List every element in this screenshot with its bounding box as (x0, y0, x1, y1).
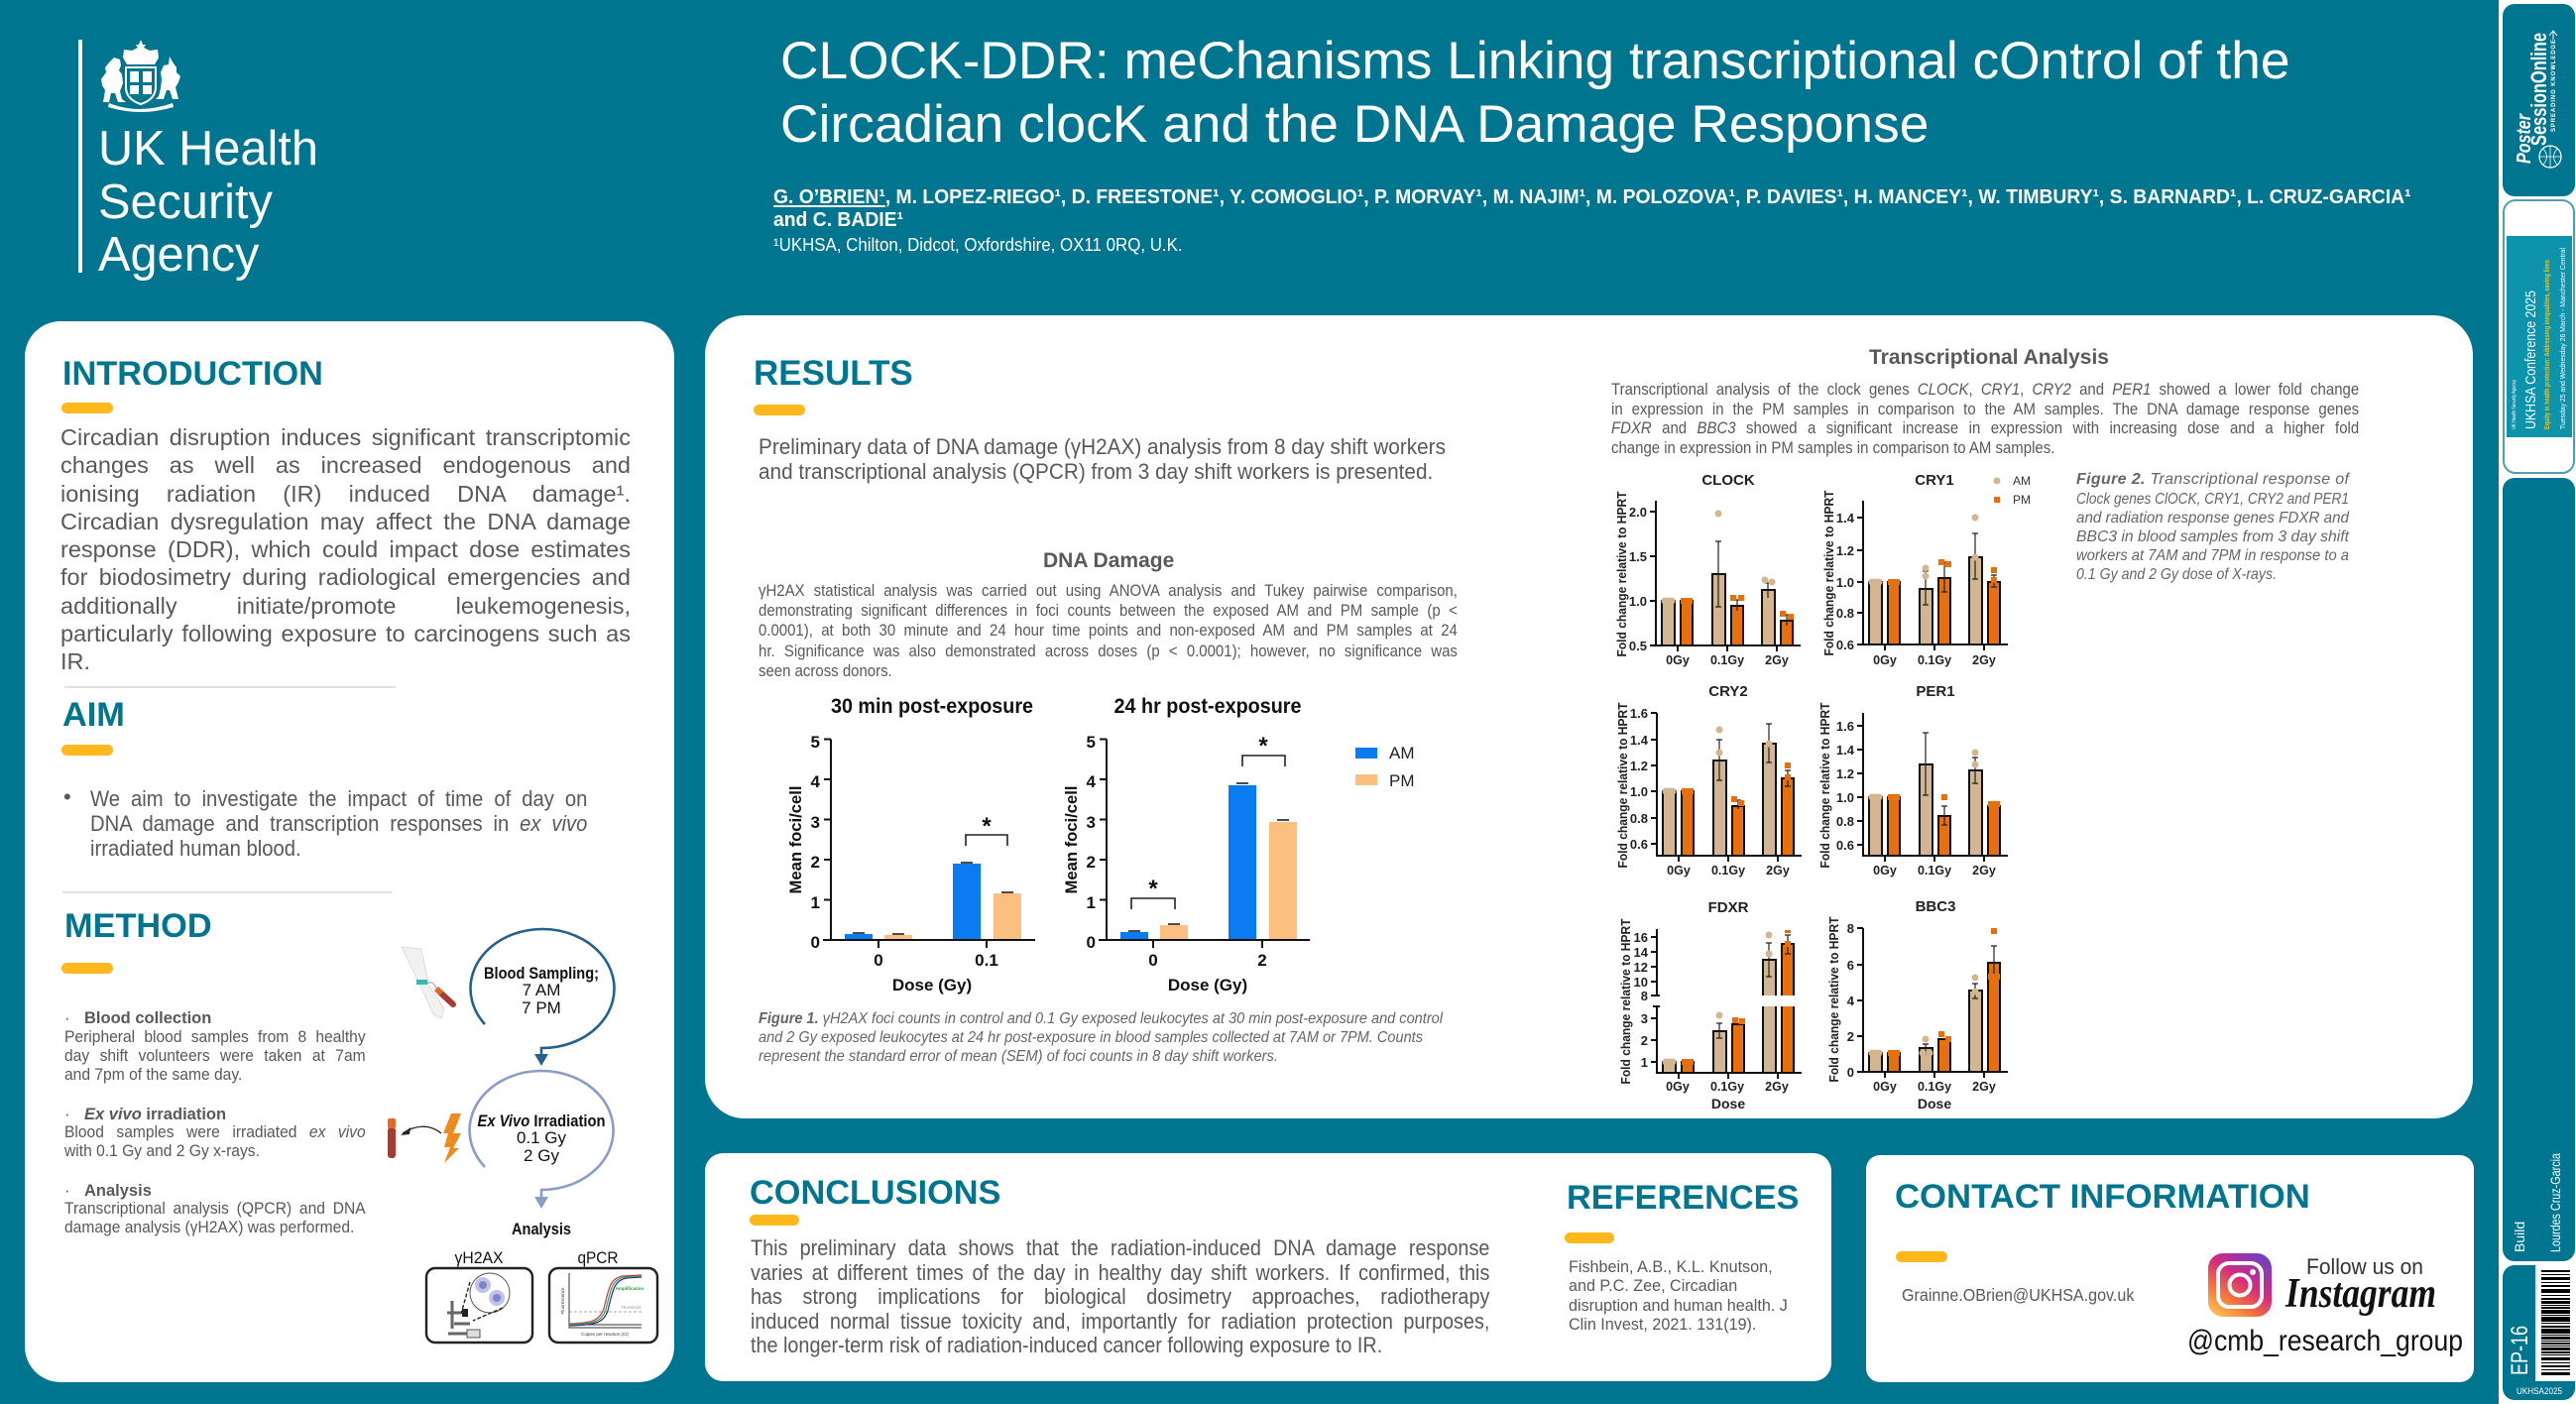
heading: results: RESULTS (754, 354, 913, 393)
caption: figure 2: workers at 7AM and 7PM in response to a (2076, 547, 2349, 564)
chart: CRY1: 1.2 (1836, 543, 1854, 558)
text: DNA damage: 0.0001), at both 30 minute and 24 hour time points and non-exposed AM and PM samples at 24 (759, 621, 1458, 640)
chart: CLOCK: 2.0 (1629, 505, 1647, 520)
bar chart: 24 hr post-exposure: 4 (1087, 772, 1097, 791)
bar chart: 24 hr post-exposure: Dose (Gy) (1168, 976, 1247, 994)
text: follow us on instagram: Instagram (2284, 1271, 2436, 1317)
chart: CRY2: 1.2 (1630, 759, 1648, 773)
chart: FDXR: 14 (1634, 945, 1649, 960)
chart: PER1 (1818, 683, 2008, 878)
chart: CRY2: 1.0 (1630, 784, 1648, 799)
heading: DNA damage: DNA Damage (1043, 549, 1174, 572)
text: introduction: IR. (60, 648, 90, 674)
bar chart: 30 min post-exposure: 0 (811, 933, 820, 952)
text: method steps: Peripheral blood samples from 8 healthy (64, 1028, 366, 1046)
text: method steps (64, 1009, 366, 1236)
chart: CRY1: 1.4 (1836, 511, 1855, 526)
caption: figure 1: and 2 Gy exposed leukocytes at 24 hr post-exposure in blood samples collected at 7AM or 7PM. Counts (759, 1029, 1423, 1046)
sidebar (2499, 0, 2576, 1404)
bar chart: 30 min post-exposure: Mean foci/cell (786, 785, 805, 894)
chart: CRY2: Fold change relative to HPRT (1616, 702, 1630, 869)
text: introduction: Circadian disruption induces significant transcriptomic (60, 424, 631, 450)
text: DNA damage: hr. Significance was also demonstrated across doses (p < 0.0001); however, no significance was (759, 642, 1458, 660)
chart: FDXR: FDXR (1708, 899, 1749, 916)
sidebar: poster session online logo: Poster (2514, 113, 2535, 164)
label: ex vivo irradiation: 0.1 Gy (517, 1128, 567, 1147)
authors: and C. BADIE¹ (773, 209, 903, 231)
text: introduction: changes as well as increased endogenous and (60, 452, 631, 478)
text: introduction: particularly following exposure to carcinogens such as (60, 621, 631, 646)
text: conclusions: has strong implications for biological dosimetry approaches, radiotherapy (751, 1284, 1489, 1309)
sidebar: conference banner: UKHSA Conference 2025 (2522, 291, 2539, 429)
chart: BBC3: Fold change relative to HPRT (1827, 916, 1841, 1083)
chart: CRY2: 2Gy (1766, 864, 1790, 878)
text: transcriptional analysis: FDXR and BBC3 showed a significant increase in expression with increasing dose and a higher fold (1611, 418, 2359, 437)
chart: FDXR: 10 (1634, 975, 1648, 990)
text: method steps: Blood collection (84, 1009, 211, 1027)
authors: G. O’BRIEN¹, M. LOPEZ-RIEGO¹, D. FREESTONE¹, Y. COMOGLIO¹, P. MORVAY¹, M. NAJIM¹, M. POLOZOVA¹, P. DAVIES¹, H. MANCEY¹, W. TIMBURY¹, S. BARNARD¹, L. CRUZ-GARCIA¹ (773, 186, 2411, 208)
bar chart: 24 hr post-exposure: 0 (1148, 951, 1158, 970)
text: aim: DNA damage and transcription responses in ex vivo (90, 811, 587, 836)
chart: CRY2: 1.6 (1630, 706, 1648, 721)
text: method steps: day shift volunteers were taken at 7am (64, 1047, 366, 1065)
legend: gene charts: PM (2013, 493, 2031, 507)
text: conclusions: induced normal tissue toxicity and, importantly for radiation protection purposes, (751, 1309, 1489, 1334)
legend: AM PM: AM (1389, 744, 1414, 762)
chart: FDXR: 2Gy (1765, 1080, 1789, 1094)
agency name: Security (98, 175, 273, 228)
text: DNA damage: seen across donors. (759, 661, 892, 680)
panel: qPCR curve: Copies per reaction (Ct) (581, 1332, 629, 1337)
chart: PER1: 0.6 (1836, 838, 1854, 853)
sidebar: conference banner: Equity in health protection: Addressing inequalities, saving lives (2542, 260, 2551, 429)
chart: BBC3: 2Gy (1972, 1080, 1996, 1094)
label: ex vivo irradiation: Ex Vivo Irradiation (478, 1112, 605, 1130)
bar chart: 24 hr post-exposure: * (1258, 733, 1268, 760)
chart: CRY2 (1616, 683, 1802, 878)
bar chart: 30 min post-exposure: 0.1 (975, 951, 998, 970)
chart: PER1: 2Gy (1972, 864, 1996, 878)
sidebar: conference banner: Tuesday 25 and Wednesday 26 March - Manchester Central (2558, 248, 2567, 429)
chart: BBC3: 4 (1847, 994, 1855, 1008)
chart: CRY1: CRY1 (1915, 472, 1954, 489)
bar chart: 30 min post-exposure: 1 (811, 893, 820, 912)
text: introduction (60, 424, 631, 674)
text: aim: We aim to investigate the impact of time of day on (90, 786, 587, 811)
sidebar: poster id and barcode: UKHSA2025 (2517, 1386, 2562, 1397)
sidebar: conference banner: UK Health Security Agency (2512, 380, 2517, 429)
icon: blood tube (388, 1118, 396, 1158)
bar chart: 24 hr post-exposure: 24 hr post-exposure (1114, 695, 1301, 718)
legend: gene charts: AM (2013, 474, 2031, 488)
panel: introduction, aim and method (25, 321, 674, 1382)
legend: gene charts (1993, 474, 2031, 507)
arrow: blood sampling (471, 929, 615, 1066)
chart: CRY2: 0.1Gy (1711, 864, 1745, 878)
legend: AM PM (1355, 744, 1414, 790)
arrow: irradiation (470, 1071, 614, 1209)
chart: CRY1: 0.8 (1836, 606, 1854, 621)
bar chart: 24 hr post-exposure: 1 (1087, 893, 1096, 912)
header: agency logo (78, 40, 318, 282)
bar chart: 30 min post-exposure: 2 (811, 853, 820, 872)
chart: BBC3 (1827, 898, 2008, 1112)
sidebar: presenter credits: Lourdes Cruz-Garcia (2547, 1153, 2563, 1252)
icon: instagram (2208, 1253, 2272, 1317)
text: reference: disruption and human health. J (1569, 1296, 1788, 1315)
chart: PER1: PER1 (1916, 683, 1955, 700)
text: method steps: Analysis (84, 1182, 152, 1200)
chart: FDXR: Dose (1711, 1096, 1745, 1112)
text: method steps: Blood samples were irradiated ex vivo (64, 1123, 366, 1141)
chart: CLOCK: 1.0 (1629, 594, 1647, 609)
legend: AM PM: PM (1389, 771, 1414, 790)
chart: BBC3: Dose (1918, 1096, 1951, 1112)
chart: CLOCK: Fold change relative to HPRT (1615, 491, 1629, 656)
chart: CRY2: CRY2 (1708, 683, 1748, 700)
panel: gamma H2AX microscope: γH2AX (454, 1248, 504, 1267)
caption: figure 2: 0.1 Gy and 2 Gy dose of X-rays. (2076, 566, 2277, 583)
panel: introduction, aim and method: • (63, 784, 71, 809)
chart: FDXR: 0.1Gy (1710, 1080, 1744, 1094)
bar chart: 24 hr post-exposure: * (1148, 876, 1158, 902)
sidebar: poster session online logo (2503, 4, 2575, 196)
heading: references: REFERENCES (1567, 1179, 1799, 1217)
chart: FDXR: 8 (1641, 989, 1648, 1003)
text: introduction: ionising radiation (IR) induced DNA damage¹. (60, 481, 631, 507)
text: method steps: Ex vivo irradiation (84, 1106, 226, 1123)
chart: BBC3: 0.1Gy (1918, 1080, 1951, 1094)
arrow: curved to tube (403, 1126, 441, 1133)
bar chart: 30 min post-exposure: 4 (811, 772, 821, 791)
chart: BBC3: 6 (1847, 958, 1854, 973)
bar chart: 30 min post-exposure: 30 min post-exposure (831, 695, 1033, 718)
chart: CRY2: 0.6 (1630, 837, 1648, 852)
chart: FDXR: 2 (1641, 1033, 1648, 1048)
caption: figure 2: and radiation response genes FDXR and (2076, 510, 2350, 526)
chart: CRY2: 0.8 (1630, 811, 1648, 826)
sidebar: poster session online logo: SPREADING KNOWLEDGE (2551, 40, 2557, 132)
text: email: Grainne.OBrien@UKHSA.gov.uk (1902, 1285, 2134, 1305)
caption: figure 2 (2076, 471, 2351, 583)
panel: qPCR curve (549, 1248, 657, 1343)
text: transcriptional analysis: in expression in the PM samples in comparison to the AM samples. The DNA damage response genes (1611, 400, 2359, 418)
text: method steps: damage analysis (γH2AX) was performed. (64, 1219, 354, 1236)
chart: PER1: 1.4 (1836, 743, 1855, 758)
chart: CRY1: 0Gy (1873, 653, 1897, 667)
sidebar: conference banner (2504, 200, 2574, 473)
title: CLOCK-DDR: meChanisms Linking transcriptional cOntrol of the (780, 32, 2289, 90)
chart: BBC3: 8 (1847, 921, 1854, 936)
chart: FDXR: Fold change relative to HPRT (1619, 918, 1633, 1085)
panel: contact information (1866, 1155, 2474, 1382)
caption: figure 1: represent the standard error of mean (SEM) of foci counts in 8 day shift workers. (759, 1048, 1278, 1065)
agency name (98, 122, 318, 282)
chart: FDXR: 1 (1641, 1055, 1648, 1070)
chart: FDXR: 12 (1634, 960, 1648, 975)
label: blood sampling: 7 PM (522, 998, 561, 1017)
agency name: Agency (98, 228, 259, 282)
chart: CRY1: 1.0 (1836, 575, 1854, 590)
text: follow us on instagram: Follow us on (2306, 1254, 2423, 1279)
bar chart: 30 min post-exposure (786, 695, 1035, 994)
sidebar: presenter credits: Build (2512, 1222, 2527, 1252)
text: introduction: response (DDR), which could impact dose estimates (60, 536, 631, 562)
panel: results (705, 315, 2473, 1118)
panel: qPCR curve: Amplification (616, 1286, 644, 1291)
chart: CLOCK: 1.5 (1629, 549, 1647, 564)
text: aim (90, 786, 587, 861)
text: DNA damage: demonstrating significant differences in foci counts between the exposed AM and PM sample (p < (759, 601, 1458, 620)
bar chart: 24 hr post-exposure: 2 (1087, 853, 1096, 872)
panel: gamma H2AX microscope (426, 1248, 532, 1343)
panel: qPCR curve: Threshold (621, 1305, 641, 1310)
text: transcriptional analysis: Transcriptional analysis of the clock genes CLOCK, CRY1, CRY2 and PER1 showed a lower fold change (1611, 380, 2359, 399)
chart: BBC3: 2 (1847, 1029, 1854, 1044)
chart: PER1: 0.8 (1836, 814, 1854, 829)
heading: transcriptional analysis: Transcriptional Analysis (1869, 346, 2109, 369)
label: ex vivo irradiation (478, 1112, 605, 1165)
text: reference: Fishbein, A.B., K.L. Knutson, (1569, 1257, 1773, 1276)
text: method steps: and 7pm of the same day. (64, 1066, 242, 1084)
chart: CLOCK: 2Gy (1765, 653, 1789, 667)
label: ex vivo irradiation: 2 Gy (524, 1146, 559, 1165)
chart: CRY2: 1.4 (1630, 733, 1649, 748)
heading: introduction: INTRODUCTION (62, 355, 323, 393)
caption: figure 2: Figure 2. Transcriptional response of (2076, 471, 2351, 488)
text: reference: and P.C. Zee, Circadian (1569, 1276, 1737, 1295)
bar chart: 24 hr post-exposure: Mean foci/cell (1062, 785, 1081, 894)
panel: conclusions and references (705, 1153, 1831, 1381)
text: conclusions: varies at different times of the day in healthy day shift workers. If confirmed, this (751, 1260, 1489, 1285)
chart: PER1: 1.2 (1836, 766, 1854, 781)
text: aim: irradiated human blood. (90, 836, 301, 861)
bar chart: 30 min post-exposure: 5 (811, 733, 820, 752)
text: conclusions (751, 1235, 1489, 1357)
chart: FDXR: 3 (1641, 1011, 1648, 1026)
bar chart: 24 hr post-exposure: 2 (1257, 951, 1267, 970)
chart: FDXR: 0Gy (1666, 1080, 1690, 1094)
chart: CLOCK (1615, 472, 1801, 667)
panel: qPCR curve: qPCR (577, 1248, 619, 1267)
heading: conclusions: CONCLUSIONS (750, 1174, 1000, 1212)
chart: CRY1: Fold change relative to HPRT (1822, 490, 1836, 656)
text: reference: Clin Invest, 2021. 131(19). (1569, 1315, 1756, 1334)
icon: royal crest (101, 40, 180, 112)
bar chart: 30 min post-exposure: * (982, 813, 992, 840)
chart: CRY1 (1822, 472, 2008, 667)
bar chart: 24 hr post-exposure: 5 (1087, 733, 1096, 752)
text: introduction: for biodosimetry during radiological emergencies and (60, 564, 631, 590)
sidebar: poster id and barcode (2503, 1265, 2575, 1400)
chart: CRY1: 0.6 (1836, 638, 1854, 652)
chart: PER1: 0.1Gy (1918, 864, 1951, 878)
text: results summary (759, 434, 1446, 484)
bar chart: 24 hr post-exposure (1062, 695, 1310, 994)
title: Circadian clocK and the DNA Damage Response (780, 95, 1929, 154)
agency name: UK Health (98, 122, 318, 176)
icon: arm blood draw (402, 947, 453, 1018)
text: method steps: Transcriptional analysis (QPCR) and DNA (64, 1200, 366, 1218)
bar chart: 24 hr post-exposure: 0 (1087, 933, 1096, 952)
chart: CRY2: 0Gy (1667, 864, 1691, 878)
text: DNA damage: γH2AX statistical analysis was carried out using ANOVA analysis and Tukey pairwise comparison, (759, 581, 1458, 600)
caption: figure 1 (759, 1010, 1443, 1065)
sidebar: poster id and barcode: EP-16 (2507, 1326, 2533, 1375)
text: follow us on instagram (2284, 1254, 2436, 1317)
sidebar: presenter credits (2503, 478, 2575, 1261)
text: method steps: · (64, 1106, 69, 1123)
authors (773, 186, 2411, 231)
heading: method: METHOD (64, 907, 212, 945)
text: method steps: · (64, 1009, 69, 1027)
heading: contact information: CONTACT INFORMATION (1895, 1178, 2310, 1216)
chart: PER1: Fold change relative to HPRT (1818, 702, 1832, 869)
chart: BBC3: BBC3 (1916, 898, 1955, 915)
bar chart: 30 min post-exposure: 0 (874, 951, 883, 970)
text: instagram handle: @cmb_research_group (2187, 1325, 2463, 1357)
chart: FDXR (1619, 899, 1802, 1112)
text: introduction: Circadian dysregulation may affect the DNA damage (60, 509, 631, 534)
text: conclusions: This preliminary data shows that the radiation-induced DNA damage response (751, 1235, 1489, 1260)
chart: CLOCK: 0.5 (1629, 639, 1647, 653)
affiliation: ¹UKHSA, Chilton, Didcot, Oxfordshire, OX11 0RQ, U.K. (773, 235, 1183, 255)
text: method steps: with 0.1 Gy and 2 Gy x-rays. (64, 1142, 260, 1160)
text: DNA damage (759, 581, 1458, 680)
heading: aim: AIM (62, 696, 125, 734)
chart: FDXR: 16 (1634, 930, 1648, 945)
caption: figure 2: Clock genes ClOCK, CRY1, CRY2 and PER1 (2076, 491, 2349, 508)
text: introduction: additionally initiate/promote leukemogenesis, (60, 593, 631, 619)
chart: BBC3: 0 (1847, 1065, 1854, 1080)
text: transcriptional analysis (1611, 380, 2359, 457)
chart: PER1: 0Gy (1873, 864, 1897, 878)
bar chart: 30 min post-exposure: 3 (811, 813, 820, 832)
text: method steps: · (64, 1182, 69, 1200)
label: analysis: Analysis (512, 1220, 571, 1238)
chart: CLOCK: 0Gy (1666, 653, 1690, 667)
text: results summary: Preliminary data of DNA damage (γH2AX) analysis from 8 day shift workers (759, 434, 1446, 458)
label: blood sampling: 7 AM (523, 981, 560, 999)
bar chart: 24 hr post-exposure: 3 (1087, 813, 1096, 832)
chart: PER1: 1.6 (1836, 719, 1854, 734)
bar chart: 30 min post-exposure: Dose (Gy) (892, 976, 972, 994)
chart: CLOCK: CLOCK (1701, 472, 1755, 489)
caption: figure 2: BBC3 in blood samples from 3 day shift (2076, 528, 2350, 545)
caption: figure 1: Figure 1. γH2AX foci counts in control and 0.1 Gy exposed leukocytes at 30 min post-exposure and control (759, 1010, 1443, 1027)
icon: lightning bolt (443, 1113, 461, 1163)
text: conclusions: the longer-term risk of radiation-induced cancer following exposure to IR. (751, 1333, 1382, 1357)
chart: CLOCK: 0.1Gy (1710, 653, 1744, 667)
title (780, 32, 2289, 154)
panel: qPCR curve: Fluorescence (560, 1287, 565, 1315)
label: blood sampling (484, 964, 599, 1017)
chart: PER1: 1.0 (1836, 790, 1854, 805)
text: results summary: and transcriptional analysis (QPCR) from 3 day shift workers is presented. (759, 458, 1433, 484)
text: transcriptional analysis: change in expression in PM samples in comparison to AM samples. (1611, 438, 2054, 457)
chart: CRY1: 0.1Gy (1918, 653, 1951, 667)
label: blood sampling: Blood Sampling; (484, 964, 599, 983)
chart: BBC3: 0Gy (1873, 1080, 1897, 1094)
text: reference (1569, 1257, 1788, 1334)
chart: CRY1: 2Gy (1972, 653, 1996, 667)
flow diagram (388, 929, 657, 1343)
